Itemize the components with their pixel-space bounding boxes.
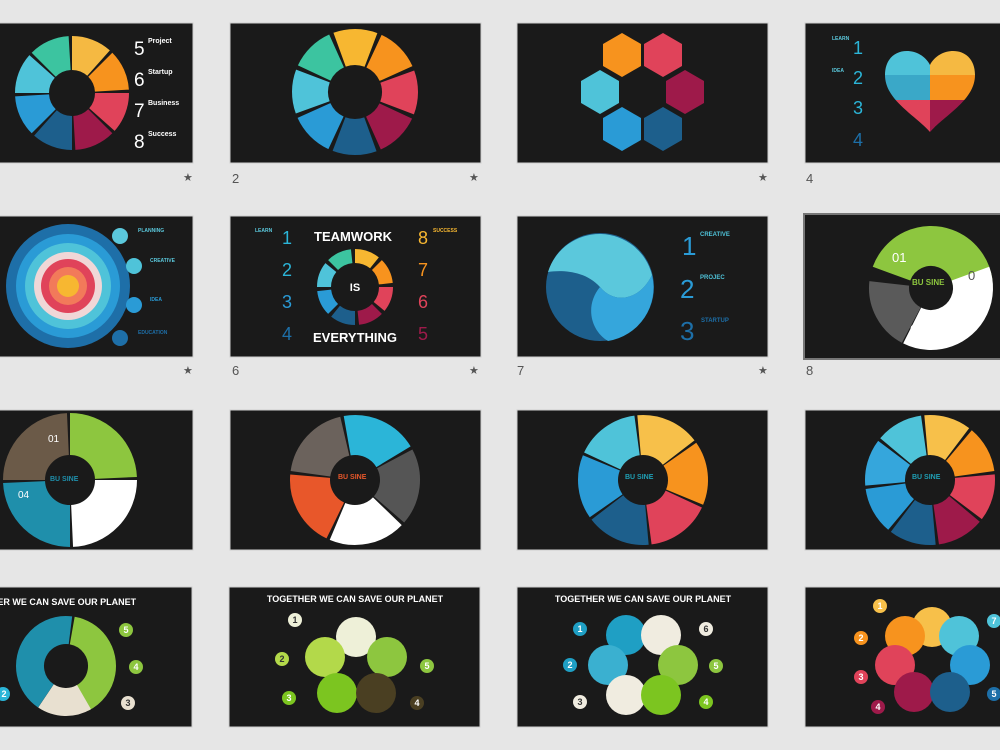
slide 9: 01 [48, 434, 60, 445]
numbered list slide 7: 2 [680, 274, 694, 304]
numbers slide 6: 2 [282, 260, 292, 280]
hexagons slide 3 [581, 33, 704, 151]
numbered nodes slide 16: 5 [991, 689, 997, 699]
numbers slide 6: 4 [282, 324, 292, 344]
text: ★ [183, 172, 193, 184]
numbered nodes slide 15: 3 [577, 697, 583, 707]
slide 7 [517, 216, 768, 357]
title slide 15: TOGETHER WE CAN SAVE OUR PLANET [555, 594, 732, 604]
numbers slide 6: 7 [418, 260, 428, 280]
slide 6: IS [350, 282, 360, 294]
slide 11 [517, 410, 768, 550]
text: 2 [232, 171, 239, 186]
slide 8: 0 [968, 268, 975, 283]
numbered list slide 1: Startup [148, 69, 172, 76]
slide 8 [804, 214, 1000, 359]
numbered nodes slide 15: 2 [567, 660, 573, 670]
numbers slide 6: 5 [418, 324, 428, 344]
numbers slide 6: 1 [282, 228, 292, 248]
numbered list slide 1: Project [148, 38, 172, 45]
labels slide 5: IDEA [150, 297, 162, 303]
text: ★ [469, 365, 479, 377]
heart chart slide 4 [885, 51, 975, 132]
swirl circle slide 7 [546, 233, 654, 341]
ring chart slide 2 [295, 32, 415, 152]
list slide 4: 2 [853, 68, 863, 88]
slide 6 [230, 216, 481, 357]
text: 4 [806, 171, 813, 186]
slide 3 [517, 23, 768, 163]
slide 8: 01 [892, 250, 906, 265]
numbered nodes slide 16: 2 [858, 633, 864, 643]
list slide 4: 4 [853, 130, 863, 150]
labels slide 5 [112, 228, 176, 346]
title teamwork: TEAMWORK [314, 229, 393, 244]
slide 9: BU SINE [50, 476, 79, 483]
ring slide 6 [311, 243, 399, 331]
slide 1 [0, 23, 193, 163]
numbered nodes slide 13: 2 [1, 689, 7, 699]
numbered list slide 1: 7 [134, 101, 145, 122]
slide 14 [229, 587, 480, 727]
ring slide 12 [867, 417, 993, 543]
ring slide 8 [874, 231, 988, 345]
numbers slide 6: LEARN [255, 228, 273, 234]
text: 7 [517, 363, 524, 378]
ring slide 13 [16, 616, 116, 716]
flower slide 15 [588, 615, 698, 715]
slide 4 [805, 23, 1000, 163]
numbers slide 6: 6 [418, 292, 428, 312]
numbers slide 6: 8 [418, 228, 428, 248]
ring slide 11 [580, 417, 706, 543]
numbered nodes slide 13 [0, 623, 143, 710]
numbered nodes slide 15: 1 [577, 624, 583, 634]
list slide 4 [832, 36, 863, 150]
numbered nodes slide 13: 4 [133, 662, 139, 672]
text: ★ [758, 365, 768, 377]
text: 8 [806, 363, 813, 378]
slide 10: BU SINE [338, 474, 367, 481]
numbered list slide 7: 3 [680, 316, 694, 346]
labels slide 5: CREATIVE [150, 258, 176, 264]
slide 11: BU SINE [625, 474, 654, 481]
list slide 4: IDEA [832, 68, 844, 74]
labels slide 5: PLANNING [138, 228, 164, 234]
numbered nodes slide 16 [854, 599, 1000, 714]
numbered list slide 7: CREATIVE [700, 232, 730, 238]
concentric target slide 5 [6, 224, 130, 348]
numbers slide 6: 3 [282, 292, 292, 312]
slide 16 [805, 587, 1000, 727]
numbered nodes slide 14 [275, 613, 434, 710]
numbered nodes slide 14: 3 [286, 693, 292, 703]
numbered list slide 1: 8 [134, 132, 145, 153]
slide 13 [0, 587, 192, 727]
numbers slide 6: SUCCESS [433, 228, 458, 234]
slide 8: 03 [910, 322, 924, 337]
ring slide 9 [24, 434, 116, 526]
numbered list slide 7: STARTUP [701, 318, 729, 324]
numbered nodes slide 16: 1 [877, 601, 883, 611]
numbered nodes slide 14: 4 [414, 698, 420, 708]
numbered list slide 1: 5 [134, 39, 145, 60]
numbered nodes slide 14: 5 [424, 661, 430, 671]
numbered nodes slide 14: 1 [292, 615, 298, 625]
text: 6 [232, 363, 239, 378]
slide 10 [230, 410, 481, 550]
numbered list slide 7: PROJEC [700, 275, 725, 281]
slide 9: 04 [18, 490, 30, 501]
numbered list slide 1: 6 [134, 70, 145, 91]
slide 15 [517, 587, 768, 727]
numbered nodes slide 13: 5 [123, 625, 129, 635]
slide 12 [805, 410, 1000, 550]
labels slide 5: EDUCATION [138, 330, 168, 336]
slide 9 [0, 410, 193, 550]
numbered list slide 7: 1 [682, 231, 696, 261]
slide 6: EVERYTHING [313, 330, 397, 345]
ring slide 10 [291, 416, 419, 544]
title slide 14: TOGETHER WE CAN SAVE OUR PLANET [267, 594, 444, 604]
numbered nodes slide 15: 6 [703, 624, 709, 634]
numbered nodes slide 15: 5 [713, 661, 719, 671]
slide 12: BU SINE [912, 474, 941, 481]
flower slide 16 [875, 607, 990, 712]
numbered nodes slide 13: 3 [125, 698, 131, 708]
numbered nodes slide 15: 4 [703, 697, 709, 707]
numbers slide 6 [255, 228, 458, 344]
numbered nodes slide 16: 7 [991, 616, 997, 626]
numbered nodes slide 16: 3 [858, 672, 864, 682]
list slide 4: 3 [853, 98, 863, 118]
numbered list slide 1: Success [148, 131, 177, 138]
numbered list slide 1 [134, 38, 179, 153]
numbered nodes slide 15 [563, 622, 723, 709]
text: ★ [469, 172, 479, 184]
ring chart slide 1 [15, 36, 129, 150]
numbered list slide 1: Business [148, 100, 179, 107]
slide 5 [0, 216, 193, 357]
list slide 4: 1 [853, 38, 863, 58]
text: ★ [183, 365, 193, 377]
slide 2 [230, 23, 481, 163]
flower slide 14 [305, 617, 407, 713]
numbered list slide 7 [680, 231, 730, 346]
numbered nodes slide 16: 4 [875, 702, 881, 712]
text: ★ [758, 172, 768, 184]
list slide 4: LEARN [832, 36, 850, 42]
numbered nodes slide 14: 2 [279, 654, 285, 664]
slide 8: BU SINE [912, 278, 945, 287]
